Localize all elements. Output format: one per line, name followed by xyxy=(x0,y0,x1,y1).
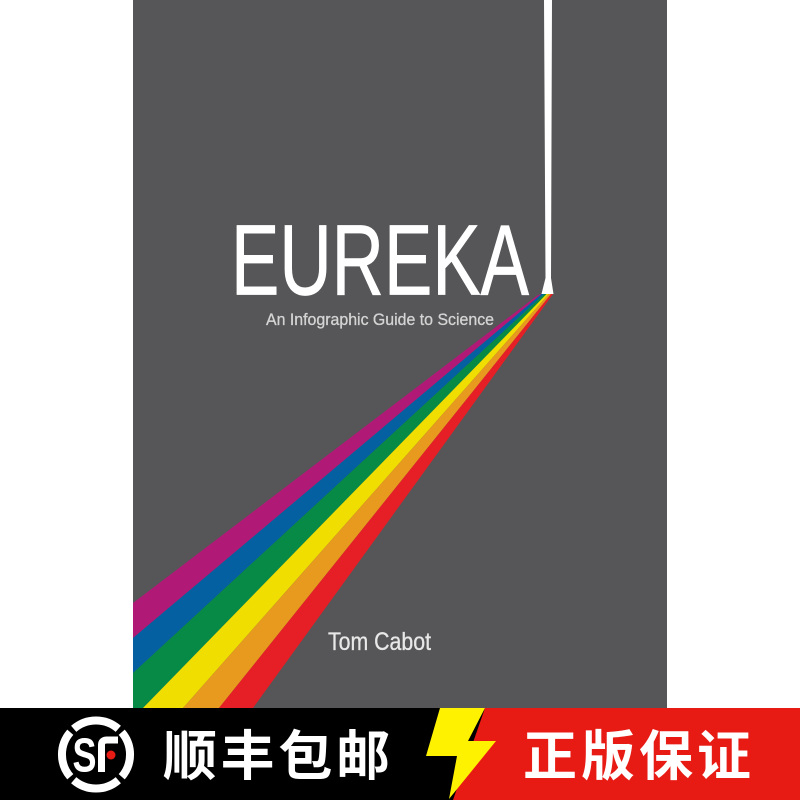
panel: book cover xyxy=(133,0,667,708)
icon: SF logo xyxy=(62,720,130,789)
authenticity text: 正版保证 xyxy=(523,727,751,787)
panel: bottom banner xyxy=(0,708,800,800)
title: EUREKA xyxy=(231,204,529,316)
chart: rainbow beam xyxy=(133,294,553,708)
red guarantee background xyxy=(453,708,800,800)
shipping text: 顺丰包邮 xyxy=(163,727,390,787)
author: Tom Cabot xyxy=(328,628,431,656)
icon: lightning bolt xyxy=(426,708,496,799)
icon: white light beam xyxy=(542,0,554,294)
icon: SF logo: S xyxy=(72,730,96,782)
subtitle: An Infographic Guide to Science xyxy=(266,310,494,329)
